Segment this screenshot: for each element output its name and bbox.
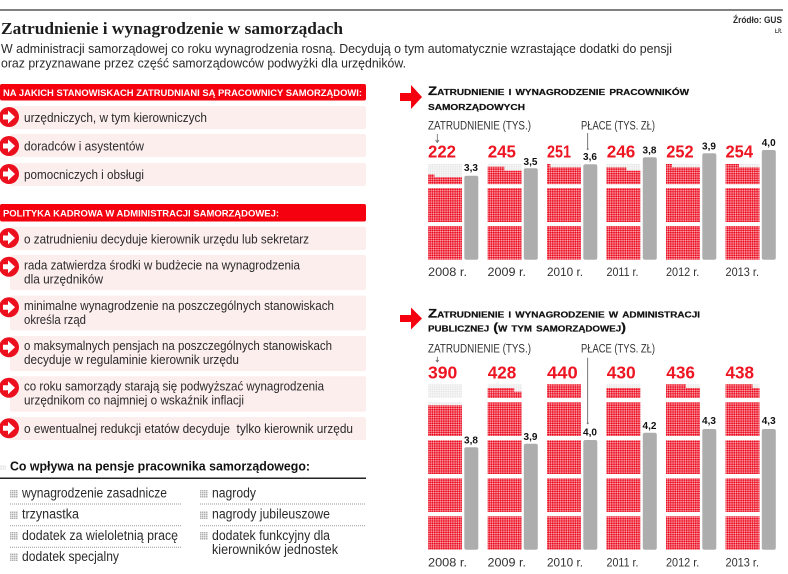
list item: rada zatwierdza środki w budżecie na wynagrodzenia bbox=[24, 258, 300, 272]
2009 column: 2009 r. bbox=[488, 265, 526, 279]
2012 column: 2012 r. bbox=[666, 265, 699, 279]
2013 column: 438 bbox=[726, 362, 754, 382]
2013 column: 2013 r. bbox=[726, 265, 759, 279]
2013 column bbox=[726, 138, 776, 279]
2010 column: 2010 r. bbox=[547, 265, 583, 279]
chart: local government employment and pay bbox=[400, 84, 776, 279]
2008 column: 2008 r. bbox=[428, 265, 467, 279]
list item bbox=[0, 376, 366, 412]
list item bbox=[0, 336, 366, 371]
source: Źródło: GUS bbox=[733, 15, 782, 26]
panel: positions bbox=[0, 84, 366, 186]
2012 column: 252 bbox=[666, 141, 694, 161]
2009 column: 3,5 bbox=[524, 157, 538, 168]
2008 column: 3,8 bbox=[464, 435, 478, 446]
2013 column: 4,3 bbox=[762, 416, 776, 427]
chart heading bbox=[428, 84, 690, 113]
2011 column bbox=[606, 362, 657, 570]
2008 column bbox=[428, 141, 478, 279]
chart: public administration employment and pay bbox=[400, 307, 776, 570]
axis labels bbox=[428, 120, 655, 150]
2008 column: 222 bbox=[428, 141, 456, 161]
list item: decyduje w regulaminie kierownik urzędu bbox=[24, 353, 239, 367]
intro text bbox=[1, 41, 672, 70]
2012 column bbox=[666, 141, 716, 279]
2009 column bbox=[488, 141, 538, 279]
panel heading bbox=[0, 84, 366, 100]
2009 column: 2009 r. bbox=[488, 556, 526, 570]
chart heading bbox=[428, 307, 700, 335]
axis labels: ZATRUDNIENIE (TYS.) bbox=[428, 120, 531, 132]
panel heading: POLITYKA KADROWA W ADMINISTRACJI SAMORZĄDOWEJ: bbox=[3, 208, 279, 220]
2012 column: 4,3 bbox=[702, 416, 716, 427]
list item: o ewentualnej redukcji etatów decyduje tylko kierownik urzędu bbox=[24, 422, 353, 436]
list item: nagrody jubileuszowe bbox=[212, 507, 330, 522]
list item: doradców i asystentów bbox=[24, 140, 145, 154]
axis labels: PŁACE (TYS. ZŁ) bbox=[581, 343, 655, 355]
panel: personnel policy bbox=[0, 204, 366, 440]
source bbox=[733, 15, 782, 35]
2008 column bbox=[428, 362, 478, 570]
2011 column: 4,2 bbox=[643, 421, 657, 432]
list item bbox=[0, 417, 366, 440]
chart heading: publicznej (w tym samorządowej) bbox=[428, 321, 626, 335]
panel: pay components bbox=[0, 459, 366, 564]
panel heading bbox=[0, 204, 366, 222]
2011 column bbox=[606, 141, 657, 279]
panel heading: Co wpływa na pensje pracownika samorządowego: bbox=[10, 459, 310, 474]
list item bbox=[0, 163, 366, 186]
icon: red arrow bbox=[400, 85, 422, 109]
2010 column bbox=[547, 141, 597, 279]
panel heading: NA JAKICH STANOWISKACH ZATRUDNIANI SĄ PRACOWNICY SAMORZĄDOWI: bbox=[3, 88, 362, 99]
2010 column: 440 bbox=[547, 362, 578, 382]
list item: wynagrodzenie zasadnicze bbox=[21, 486, 167, 501]
list item: określa rząd bbox=[24, 313, 86, 327]
axis labels: ZATRUDNIENIE (TYS.) bbox=[428, 343, 531, 355]
list item: nagrody bbox=[212, 486, 256, 501]
2013 column: 4,0 bbox=[762, 138, 776, 149]
2012 column bbox=[666, 362, 716, 570]
list item bbox=[0, 255, 366, 290]
title: Zatrudnienie i wynagrodzenie w samorządach bbox=[1, 19, 344, 38]
list item: pomocniczych i obsługi bbox=[24, 168, 144, 182]
2010 column: 4,0 bbox=[583, 428, 597, 439]
list item: kierowników jednostek bbox=[212, 542, 338, 557]
2013 column bbox=[726, 362, 776, 570]
2009 column: 3,9 bbox=[524, 432, 538, 443]
2011 column: 2011 r. bbox=[606, 556, 638, 570]
list item: o zatrudnieniu decyduje kierownik urzędu lub sekretarz bbox=[24, 232, 309, 246]
list item: dodatek za wieloletnią pracę bbox=[22, 528, 178, 543]
2013 column: 2013 r. bbox=[726, 556, 759, 570]
chart heading: Zatrudnienie i wynagrodzenie pracowników bbox=[428, 84, 690, 98]
2010 column: 3,6 bbox=[583, 152, 597, 163]
list item: trzynastka bbox=[22, 507, 79, 522]
list item bbox=[0, 106, 366, 129]
list item: co roku samorządy starają się podwyższać wynagrodzenia bbox=[24, 380, 324, 394]
list item bbox=[0, 134, 366, 157]
axis labels: PŁACE (TYS. ZŁ) bbox=[581, 120, 655, 132]
2011 column: 430 bbox=[607, 362, 636, 382]
2008 column: 390 bbox=[428, 362, 458, 382]
2011 column: 2011 r. bbox=[606, 265, 638, 279]
list item: dodatek funkcyjny dla bbox=[212, 528, 330, 543]
2012 column: 2012 r. bbox=[666, 556, 699, 570]
chart heading: Zatrudnienie i wynagrodzenie w administracji bbox=[428, 307, 700, 321]
2010 column bbox=[547, 362, 597, 570]
2008 column: 2008 r. bbox=[428, 556, 467, 570]
source: Ł.R. bbox=[775, 29, 782, 35]
list item: o maksymalnych pensjach na poszczególnych stanowiskach bbox=[24, 339, 332, 353]
list item bbox=[0, 296, 366, 330]
chart heading: samorządowych bbox=[428, 99, 525, 113]
intro text: oraz przyznawane przez część samorządowców podwyżki dla urzędników. bbox=[1, 56, 406, 70]
2010 column: 251 bbox=[547, 141, 571, 161]
intro text: W administracji samorządowej co roku wynagrodzenia rosną. Decydują o tym automatycznie wzrastające dodatki do pensji bbox=[1, 41, 672, 56]
list item: urzędnikom co najmniej o wskaźnik inflacji bbox=[24, 394, 244, 408]
2013 column: 254 bbox=[726, 141, 753, 161]
2009 column: 245 bbox=[488, 141, 516, 161]
list item: minimalne wynagrodzenie na poszczególnych stanowiskach bbox=[24, 299, 334, 313]
list item bbox=[0, 227, 366, 250]
2009 column: 428 bbox=[488, 362, 517, 382]
list item: dodatek specjalny bbox=[22, 549, 119, 564]
2009 column bbox=[488, 362, 538, 570]
axis labels bbox=[428, 343, 655, 424]
2010 column: 2010 r. bbox=[547, 556, 583, 570]
2011 column: 3,8 bbox=[643, 145, 657, 156]
list item bbox=[200, 528, 338, 557]
2012 column: 3,9 bbox=[702, 141, 716, 152]
icon: red arrow bbox=[400, 308, 422, 330]
list item: urzędniczych, w tym kierowniczych bbox=[24, 111, 207, 125]
2008 column: 3,3 bbox=[464, 163, 478, 174]
list item: dla urzędników bbox=[24, 272, 104, 286]
2012 column: 436 bbox=[666, 362, 695, 382]
2011 column: 246 bbox=[607, 141, 636, 161]
